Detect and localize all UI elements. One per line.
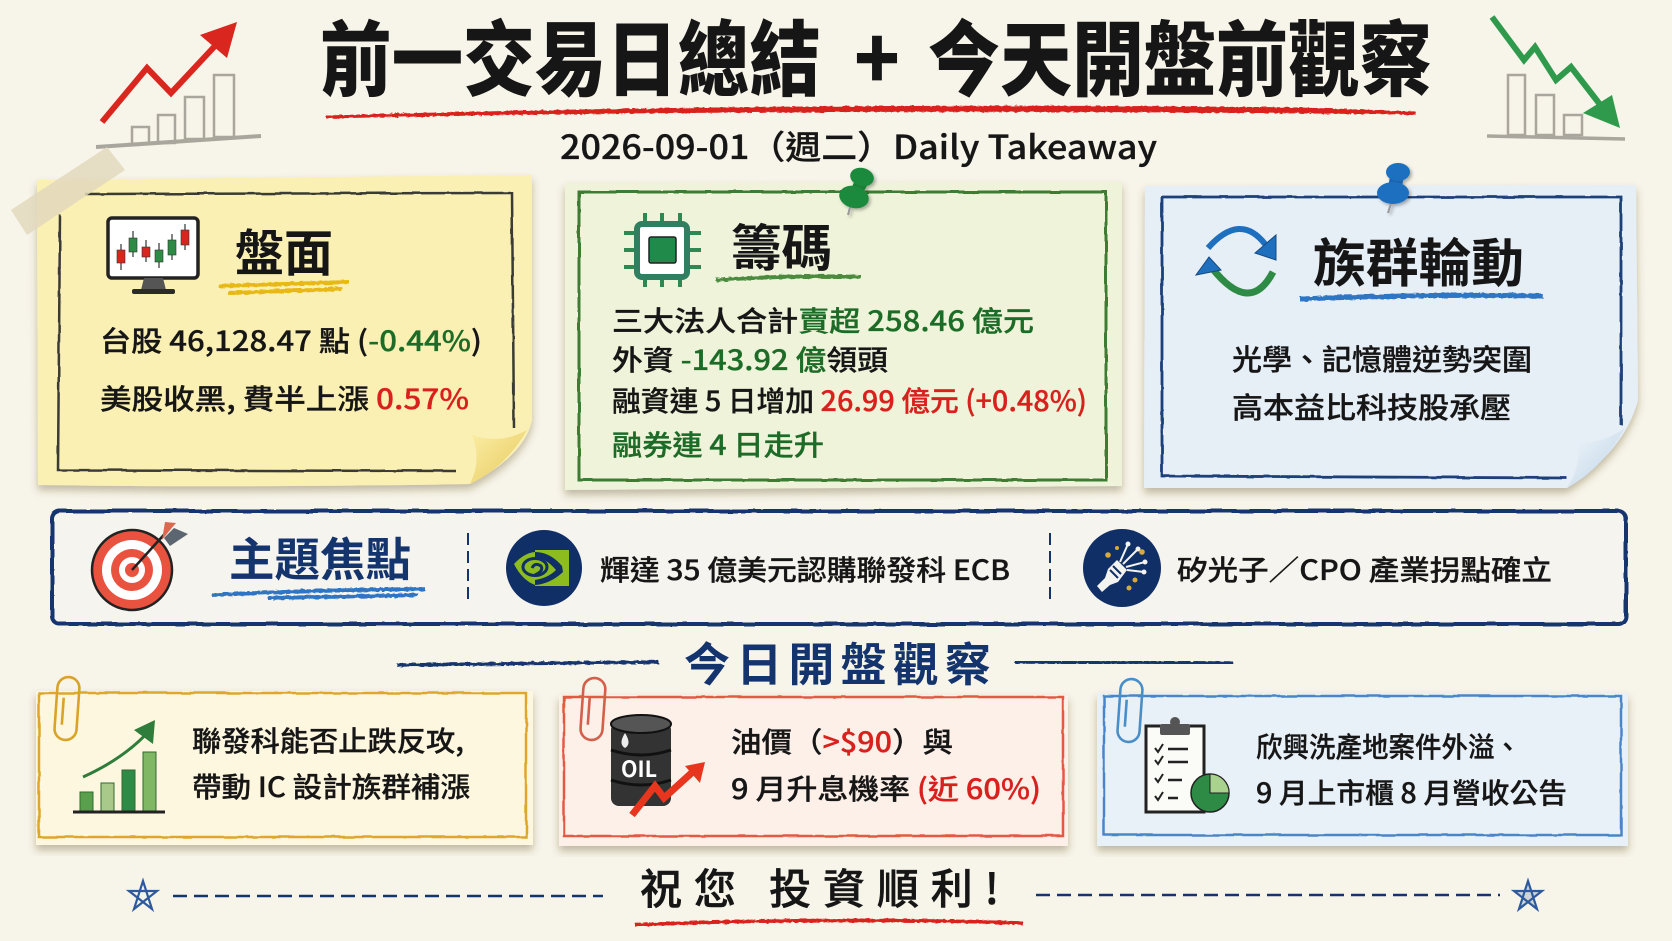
icon: green pushpin [837,165,876,215]
note paper [565,182,1122,490]
card text: 帶動 IC 設計族群補漲 [192,766,470,806]
card paper [1097,693,1628,846]
panel: 主題焦點 [52,511,1626,624]
card text: 9 月上市櫃 8 月營收公告 [1256,772,1567,812]
icon: blue pushpin [1377,163,1410,213]
icon: paper clip [580,677,606,741]
panel: 籌碼 [565,165,1122,490]
card border [39,693,526,837]
icon: silicon photonics badge [1083,529,1161,607]
icon: paper clip [54,676,80,741]
card text: 聯發科能否止跌反攻, [192,720,464,760]
note paper [37,175,532,486]
icon: target [92,522,188,610]
item text: 輝達 35 億美元認購聯發科 ECB [600,549,1010,589]
note paper [1144,185,1638,488]
card text [192,720,470,806]
icon: rotation arrows [1196,229,1276,293]
body text: 融資連 5 日增加 26.99 億元 (+0.48%) [612,380,1087,420]
section heading: 今日開盤觀察: 今日開盤觀察 [684,629,991,695]
icon: NVIDIA badge [506,530,582,606]
card paper [36,691,533,845]
body text: 融券連 4 日走升 [612,424,824,464]
heading underline [1300,295,1543,299]
heading: 族群輪動 [1313,222,1524,297]
heading: 主題焦點 [229,524,411,590]
icon: oil barrel: OIL [621,752,657,784]
closing underline [635,920,1023,925]
heading underline [212,589,425,598]
band frame [52,511,1626,624]
icon: falling chart [1487,17,1625,139]
card: 聯發科 [36,676,533,845]
icon: paper clip [1117,678,1143,743]
body text: 光學、記憶體逆勢突圍 [1232,337,1532,379]
heading: 盤面 [235,214,333,286]
body text: 外資 -143.92 億 領頭 [612,339,888,379]
body text [100,320,482,418]
divider [467,533,469,600]
heading underline [219,282,349,293]
card text: 欣興洗產地案件外溢、 [1256,726,1521,766]
icon: star right [1514,881,1542,909]
subtitle: 2026-09-01（週二）Daily Takeaway [560,121,1157,169]
panel: 族群輪動 [1144,163,1638,488]
body text: 美股收黑, 費半上漲 0.57% [100,378,469,418]
page curl [1567,428,1625,488]
item text: 矽光子／CPO 產業拐點確立 [1177,549,1552,589]
body text: 台股 46,128.47 點 ( -0.44% ) [100,320,482,360]
body text: 高本益比科技股承壓 [1232,385,1511,427]
heading underline [716,276,861,280]
card paper [559,695,1068,846]
heading: 籌碼 [731,209,832,281]
page curl [470,430,527,484]
card text [731,721,1041,808]
icon: clipboard with pie [1146,717,1229,812]
body text: 三大法人合計 賣超 258.46 億元 [612,300,1034,340]
icon: oil barrel [611,715,705,815]
note border [58,193,514,471]
body text [1232,337,1532,427]
card text [1256,726,1567,812]
card: 欣興 [1097,678,1628,846]
icon: star left [129,881,157,909]
body text [612,300,1087,464]
card: 油價 [559,677,1068,846]
panel: 盤面 [11,147,532,486]
icon: rising chart [96,22,261,147]
closing line [129,856,1542,925]
closing text: 祝您 投資順利! [640,856,999,917]
card text: 9 月升息機率 (近 60%) [731,768,1041,808]
note border [1162,197,1621,478]
divider [1049,533,1051,600]
title [320,0,1432,113]
card text: 油價（ >$90）與 [731,721,953,761]
note border [579,192,1106,480]
icon: candlestick monitor [108,218,198,294]
icon: growth bars [73,720,165,812]
icon: chip [624,213,701,287]
masking tape [11,147,125,235]
card border [564,697,1063,836]
card border [1104,696,1621,835]
section heading: 今日開盤觀察 [397,629,1233,695]
title underline [326,107,1416,117]
